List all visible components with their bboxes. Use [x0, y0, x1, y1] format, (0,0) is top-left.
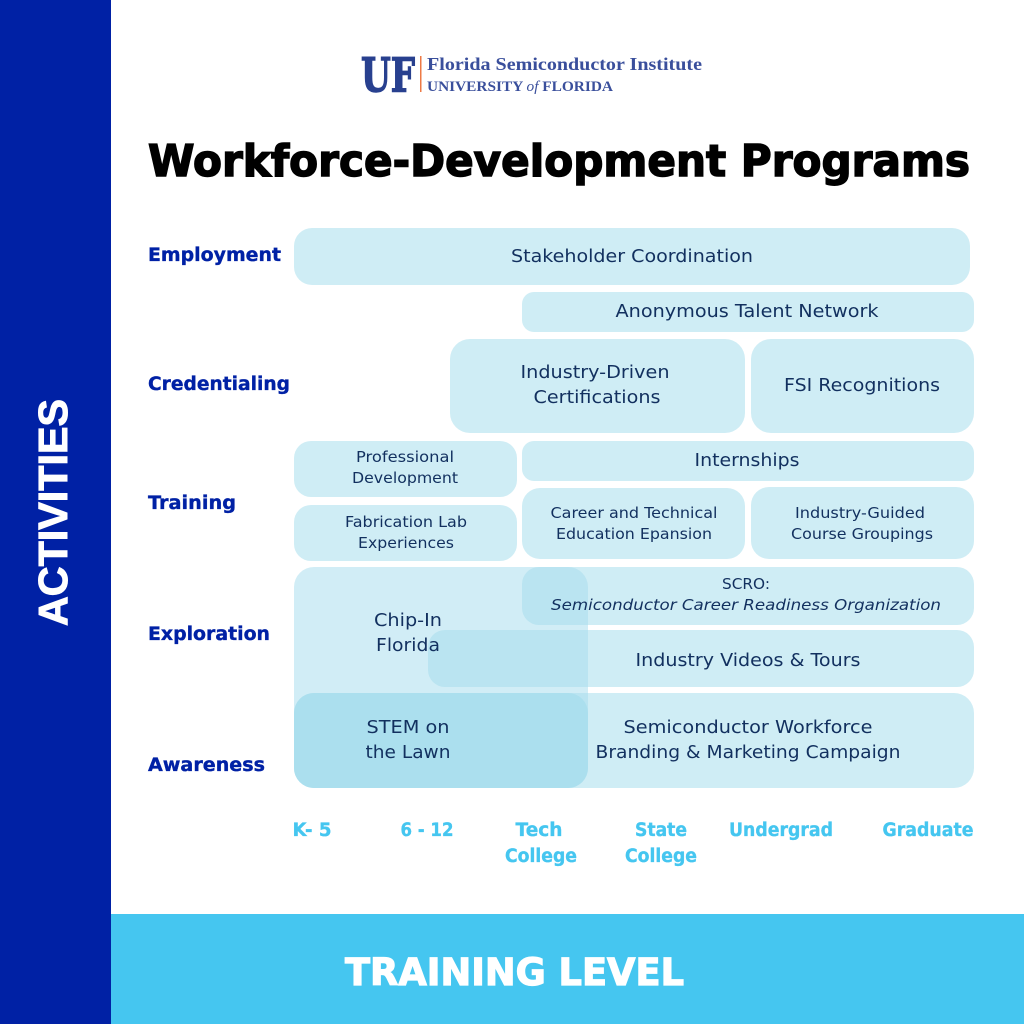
- box: Chip-In Florida: [294, 567, 588, 788]
- box: Career and Technical Education Expansion: [522, 488, 745, 559]
- training level labels: 6 - 12: [400, 820, 454, 841]
- box: Industry-Guided Course Groupings: [751, 487, 974, 559]
- box: Professional Development: [294, 441, 517, 497]
- box: Industry-Guided Course Groupings: Industry-Guided: [795, 504, 925, 522]
- box: Fabrication Lab Experiences: [294, 505, 517, 561]
- training level labels: Graduate: [882, 820, 974, 841]
- activity labels: Awareness: [148, 755, 265, 776]
- training level labels: Tech: [516, 820, 562, 841]
- box: Professional Development: Professional: [356, 448, 454, 466]
- activity labels: Employment: [148, 245, 281, 266]
- box: Industry-Driven Certifications: [450, 339, 745, 433]
- text: Industry Videos and Tours label: Industry Videos & Tours: [636, 650, 860, 671]
- logo: UF Florida Semiconductor Institute: [361, 48, 702, 104]
- overlay: STEM on the Lawn: STEM on: [366, 717, 450, 738]
- box: Semiconductor Workforce Branding and Marketing Campaign: [294, 693, 974, 788]
- box: Anonymous Talent Network: Anonymous Talent Network: [616, 301, 879, 322]
- activity labels: Training: [148, 493, 236, 514]
- overlay: STEM on the Lawn: the Lawn: [366, 742, 450, 763]
- box: Anonymous Talent Network: [522, 292, 974, 332]
- box: FSI Recognitions: FSI Recognitions: [784, 375, 940, 396]
- box: Internships: [522, 441, 974, 481]
- box: Fabrication Lab Experiences: Fabrication Lab: [345, 513, 467, 531]
- overlay: STEM on the Lawn: [294, 693, 588, 788]
- logo: UF Florida Semiconductor Institute: Florida Semiconductor Institute: [427, 54, 702, 74]
- footer band: training level axis: TRAINING LEVEL: [345, 951, 684, 994]
- activity labels: Credentialing: [148, 374, 290, 395]
- training level labels: State: [635, 820, 687, 841]
- box: Career and Technical Education Expansion: Education Epansion: [556, 525, 712, 543]
- text: SCRO label: Semiconductor Career Readiness Organization: [551, 596, 941, 614]
- training level labels: College: [505, 846, 577, 867]
- logo: UF Florida Semiconductor Institute: UF: [361, 48, 415, 104]
- activity labels: Exploration: [148, 624, 270, 645]
- box: Career and Technical Education Expansion: Career and Technical: [550, 504, 718, 522]
- text: SCRO label: SCRO:: [722, 575, 770, 593]
- activity labels: [148, 245, 290, 776]
- box: Chip-In Florida: Chip-In: [374, 610, 442, 631]
- box: Industry-Guided Course Groupings: Course Groupings: [791, 525, 933, 543]
- training level labels: K- 5: [292, 820, 332, 841]
- box: Industry Videos and Tours: [428, 630, 974, 687]
- box: Stakeholder Coordination: [294, 228, 970, 285]
- box: FSI Recognitions: [751, 339, 974, 433]
- title: Workforce-Development Programs: [148, 136, 970, 187]
- box: Semiconductor Workforce Branding and Marketing Campaign: Branding & Marketing Campaign: [596, 742, 900, 763]
- box: Industry-Driven Certifications: Certifications: [534, 387, 660, 408]
- box: Internships: Internships: [694, 450, 800, 471]
- footer band: training level axis: [111, 914, 1024, 1024]
- box: Stakeholder Coordination: Stakeholder Coordination: [511, 246, 753, 267]
- training level labels: College: [625, 846, 697, 867]
- box: Chip-In Florida: Florida: [376, 635, 440, 656]
- box: Industry-Driven Certifications: Industry-Driven: [520, 362, 670, 383]
- logo: UF Florida Semiconductor Institute: UNIVERSITY of FLORIDA: [427, 79, 614, 95]
- sidebar: activities axis: ACTIVITIES: [30, 399, 76, 626]
- box: Fabrication Lab Experiences: Experiences: [358, 534, 454, 552]
- box: Professional Development: Development: [352, 469, 458, 487]
- box: Semiconductor Workforce Branding and Marketing Campaign: Semiconductor Workforce: [624, 717, 872, 738]
- sidebar: activities axis: [0, 0, 111, 1024]
- training level labels: Undergrad: [729, 820, 833, 841]
- box: SCRO: [522, 567, 974, 625]
- training level labels: [292, 820, 974, 867]
- text: SCRO label: [551, 575, 941, 614]
